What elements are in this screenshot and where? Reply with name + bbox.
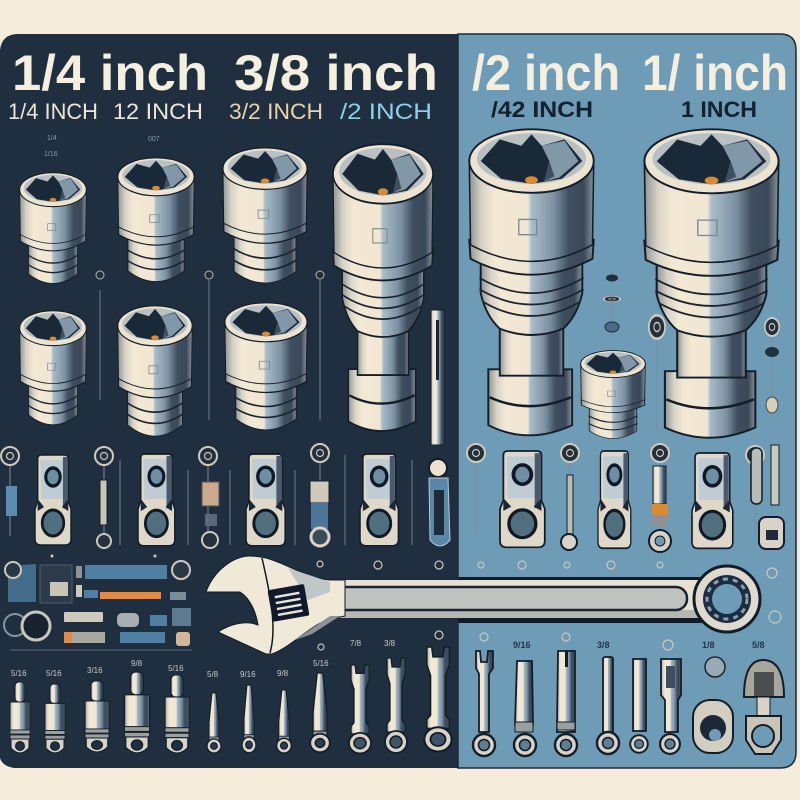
tiny socket captions: 007 xyxy=(148,136,160,143)
bracket 3 xyxy=(246,454,285,546)
screwdriver xyxy=(429,310,450,546)
wrench outline on blue xyxy=(458,577,720,623)
bracket 1 xyxy=(35,455,71,545)
tool: small bracket xyxy=(751,445,784,549)
wrench ring end xyxy=(694,566,760,632)
small size labels: 3/8 xyxy=(384,639,396,648)
tiny socket captions xyxy=(44,135,160,158)
tool: round knob xyxy=(705,657,725,677)
wrench head xyxy=(206,556,345,654)
tool: ring blob xyxy=(693,700,733,753)
small tools row: blue panel xyxy=(473,651,784,756)
connector pins xyxy=(1,271,779,558)
tiny markers xyxy=(317,561,781,650)
parts tray xyxy=(4,561,192,650)
panel: blue right side xyxy=(458,34,796,768)
adjustable wrench xyxy=(206,556,760,654)
small size labels: 9/16 xyxy=(240,670,256,679)
socket: 3/2 inch xyxy=(223,148,307,283)
tool: large fork xyxy=(744,660,784,754)
tool: slim bar xyxy=(597,657,619,754)
size labels: blue panel: 1/8 xyxy=(702,640,715,650)
small size labels: 9/8 xyxy=(131,659,143,668)
heading: 3/8 inch: 3/8 inch xyxy=(234,45,438,101)
socket: small xyxy=(20,311,86,425)
small size labels: 5/16 xyxy=(11,669,27,678)
wrench slot xyxy=(323,587,687,610)
socket row 1 xyxy=(20,144,433,431)
bracket 7 xyxy=(692,453,733,548)
small size labels: 5/16 xyxy=(46,669,62,678)
small size labels: 5/8 xyxy=(207,670,219,679)
wrench handle xyxy=(320,580,720,618)
tool: stepped bar xyxy=(660,659,681,754)
subheading: 1 INCH: 1 INCH xyxy=(681,97,757,122)
size labels: blue panel xyxy=(513,640,765,650)
heading: 1/4 inch: 1/4 inch xyxy=(12,45,208,101)
small size labels: 5/16 xyxy=(168,664,184,673)
size labels: blue panel: 5/8 xyxy=(752,640,765,650)
tool: orange band xyxy=(649,466,671,552)
small drivers in dark panel xyxy=(6,480,329,548)
socket: long 1 inch xyxy=(644,129,779,438)
bracket row: blue panel xyxy=(500,445,784,552)
panel: dark left side xyxy=(0,34,458,768)
tool: slotted bar xyxy=(555,651,577,756)
socket: small blue side xyxy=(581,351,645,439)
subheading: 1/4 INCH: 1/4 INCH xyxy=(8,99,98,124)
small size labels xyxy=(11,639,396,679)
tiny socket captions: 1/16 xyxy=(44,151,58,158)
socket: long 1/2 inch xyxy=(469,129,594,435)
tool: open fork xyxy=(473,651,495,756)
socket: 12 inch xyxy=(118,158,194,282)
wrench adjuster xyxy=(267,584,309,622)
small size labels: 3/16 xyxy=(87,666,103,675)
socket: large xyxy=(225,303,307,430)
subheading: /2 INCH: /2 INCH xyxy=(340,99,432,124)
socket: long 3/8 inch xyxy=(333,144,433,431)
subheading: /42 INCH: /42 INCH xyxy=(491,97,593,122)
socket row 2 xyxy=(20,303,307,436)
small size labels: 5/16 xyxy=(313,659,329,668)
tiny socket captions: 1/4 xyxy=(47,135,57,142)
socket: medium xyxy=(118,306,192,436)
size labels: blue panel: 9/16 xyxy=(513,640,531,650)
bracket 5 xyxy=(500,451,545,547)
tool: short bar xyxy=(630,659,648,753)
bracket 4 xyxy=(360,454,398,546)
small size labels: 9/8 xyxy=(277,669,289,678)
size labels: blue panel: 3/8 xyxy=(597,640,610,650)
subheading: 12 INCH: 12 INCH xyxy=(113,99,203,124)
socket: 1/4 inch xyxy=(20,173,86,284)
tool: flat bar xyxy=(514,661,536,756)
bracket row: dark panel xyxy=(35,454,398,546)
small bits row: dark panel xyxy=(10,647,452,753)
small size labels: 7/8 xyxy=(350,639,362,648)
heading: /2 inch: /2 inch xyxy=(472,45,620,101)
bracket 2 xyxy=(138,454,175,546)
subheading: 3/2 INCH: 3/2 INCH xyxy=(229,99,323,124)
bracket 6 xyxy=(598,451,631,548)
tool: rod with ring xyxy=(561,475,577,550)
heading: 1/ inch: 1/ inch xyxy=(642,45,788,101)
